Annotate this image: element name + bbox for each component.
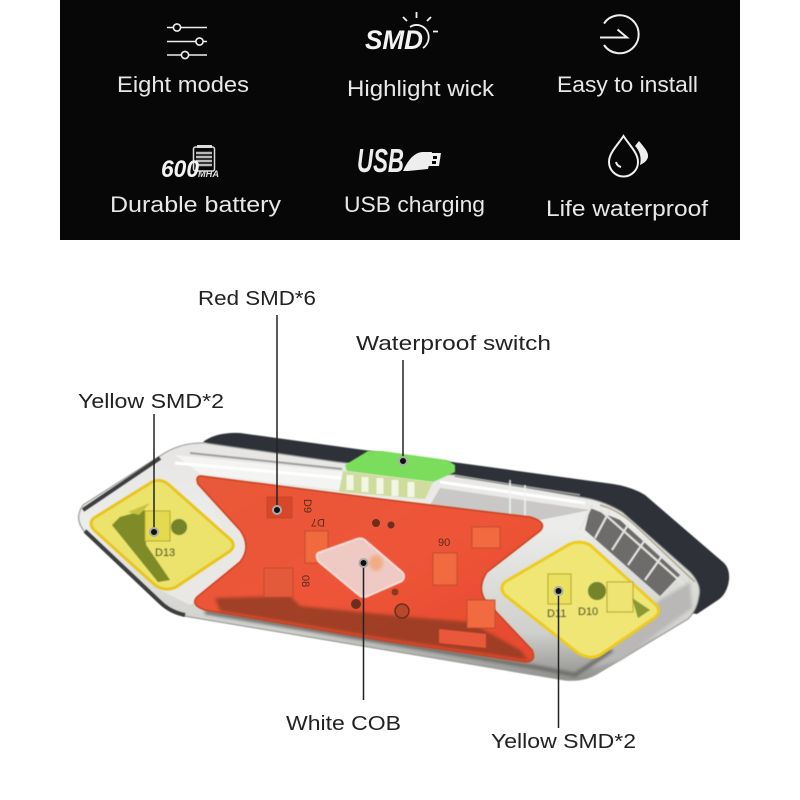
icon: SMD sun: SMD	[365, 25, 423, 55]
top lens ribbing	[175, 453, 590, 520]
green waterproof switch	[345, 451, 455, 482]
callout: white COB: White COB	[286, 712, 401, 735]
label: highlight wick: Highlight wick	[347, 76, 495, 101]
board markings and dots: 08	[299, 575, 311, 587]
clear lens body	[79, 443, 700, 680]
callout: red SMD: Red SMD*6	[198, 287, 316, 310]
callout: red SMD	[198, 287, 316, 514]
white glass behind left notch	[160, 470, 253, 605]
icon: water drops	[609, 136, 648, 176]
icon: sliders	[167, 24, 207, 59]
panel: feature icons	[60, 0, 740, 240]
glass right corner haze	[590, 582, 692, 668]
dark components along bottom of board	[215, 596, 528, 660]
right yellow details	[547, 574, 650, 620]
callout: right yellow SMD	[491, 587, 636, 753]
label: USB charging: USB charging	[344, 192, 485, 217]
callout: white COB	[286, 559, 401, 735]
lower red capacitor	[439, 629, 486, 648]
callout: right yellow SMD: Yellow SMD*2	[491, 730, 636, 753]
lens grid on right	[580, 505, 695, 596]
icon: install arrow in circle	[600, 15, 639, 53]
board markings and dots: D9	[301, 499, 313, 513]
left yellow details: D13	[155, 547, 175, 559]
icon: 600 MHA battery	[161, 145, 219, 183]
icon: 600 MHA battery: MHA	[198, 169, 219, 179]
right yellow details: D11	[547, 608, 566, 620]
callout: waterproof switch	[356, 332, 551, 465]
icon: USB plug: USB	[357, 142, 404, 179]
board markings and dots: 90	[438, 537, 450, 549]
right yellow details: D10	[578, 606, 598, 618]
left yellow details	[112, 503, 187, 582]
label: durable battery: Durable battery	[110, 192, 281, 217]
left dark edge of lens	[83, 458, 185, 615]
bottom shaded edge	[205, 612, 612, 675]
black rear housing	[203, 433, 729, 614]
board markings and dots: D7	[311, 516, 325, 528]
red SMD LEDs	[264, 497, 500, 628]
label: eight modes: Eight modes	[117, 72, 249, 97]
label: life waterproof: Life waterproof	[546, 196, 709, 221]
COB highlight	[369, 555, 383, 571]
label: easy to install: Easy to install	[557, 72, 698, 97]
icon: 600 MHA battery: 600	[161, 156, 200, 183]
left yellow panel	[91, 480, 233, 589]
callout: left yellow SMD	[78, 390, 224, 536]
panel: tail light photo	[79, 433, 729, 680]
white COB diamond	[317, 538, 404, 597]
switch light guide	[339, 471, 433, 499]
red circuit board	[195, 476, 542, 662]
right yellow panel	[502, 542, 659, 657]
callout: left yellow SMD: Yellow SMD*2	[78, 390, 224, 413]
board markings and dots	[299, 499, 450, 618]
callout: waterproof switch: Waterproof switch	[356, 332, 551, 355]
icon: SMD sun	[365, 12, 438, 55]
